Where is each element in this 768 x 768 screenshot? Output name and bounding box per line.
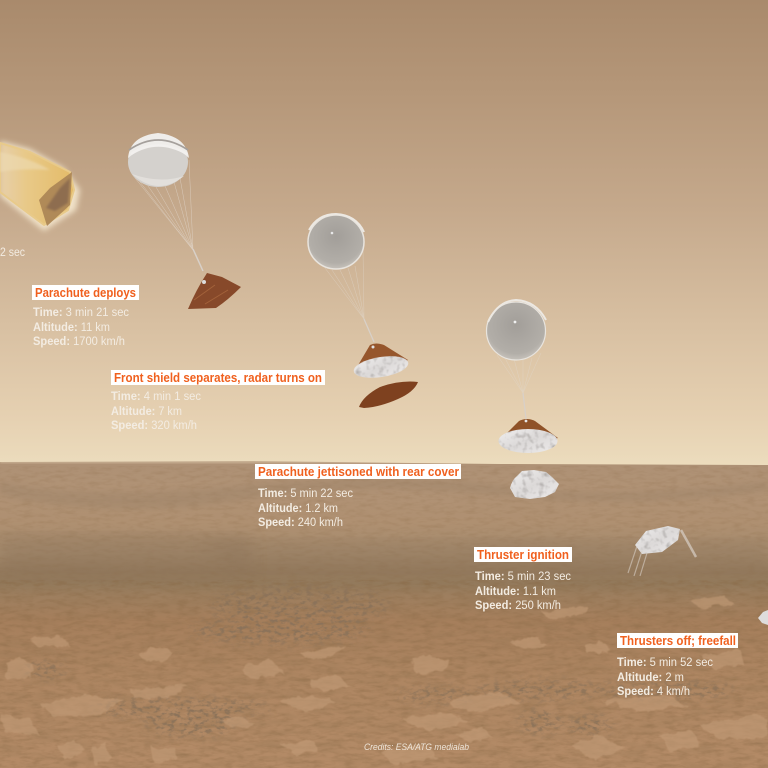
label: parachute jettisoned: Speed: 240 km/h: [258, 517, 343, 529]
label: thrusters off: Altitude: 2 m: [617, 672, 684, 684]
label: thruster ignition: Thruster ignition: [477, 548, 569, 562]
label: thrusters off: Thrusters off; freefall: [620, 634, 736, 648]
label: front shield separates: Time: 4 min 1 sec: [111, 391, 201, 403]
label: front shield separates: Altitude: 7 km: [111, 406, 182, 418]
label: front shield separates: [111, 370, 325, 432]
label: thrusters off: Time: 5 min 52 sec: [617, 657, 713, 669]
cropped time label: 2 sec: [0, 247, 25, 259]
label: parachute deploys: Time: 3 min 21 sec: [33, 307, 129, 319]
label: parachute deploys: Altitude: 11 km: [33, 322, 110, 334]
parachute 3 with capsule: [486, 300, 558, 453]
label: thruster ignition: Time: 5 min 23 sec: [475, 571, 571, 583]
label: parachute jettisoned: Parachute jettisoned with rear cover: [258, 465, 459, 479]
label: parachute jettisoned: [255, 464, 461, 529]
parachute 2 with capsule and front shield: [308, 214, 418, 408]
parachute 1 with capsule: [128, 133, 241, 309]
label: front shield separates: Front shield separates, radar turns on: [114, 371, 322, 385]
label: parachute jettisoned: Time: 5 min 22 sec: [258, 488, 353, 500]
lander after separation: [510, 470, 559, 499]
label: thrusters off: Speed: 4 km/h: [617, 686, 690, 698]
label: front shield separates: Speed: 320 km/h: [111, 420, 197, 432]
horizon glow: [0, 457, 768, 463]
lander with thruster plumes: [628, 526, 696, 576]
label: parachute deploys: [32, 285, 139, 348]
lander at right edge: [758, 610, 768, 625]
label: parachute deploys: Speed: 1700 km/h: [33, 336, 125, 348]
label: thruster ignition: Speed: 250 km/h: [475, 600, 561, 612]
label: parachute jettisoned: Altitude: 1.2 km: [258, 503, 338, 515]
label: thruster ignition: [474, 547, 572, 612]
credits: Credits: ESA/ATG medialab: [364, 742, 469, 752]
label: thrusters off: [617, 633, 738, 698]
entry capsule with plasma: [0, 141, 80, 231]
sky background: [0, 0, 768, 466]
dark rocky ridge: [21, 585, 735, 737]
pale rock slabs: [0, 595, 768, 765]
label: thruster ignition: Altitude: 1.1 km: [475, 586, 556, 598]
label: parachute deploys: Parachute deploys: [35, 286, 136, 300]
martian ground: [0, 461, 768, 768]
